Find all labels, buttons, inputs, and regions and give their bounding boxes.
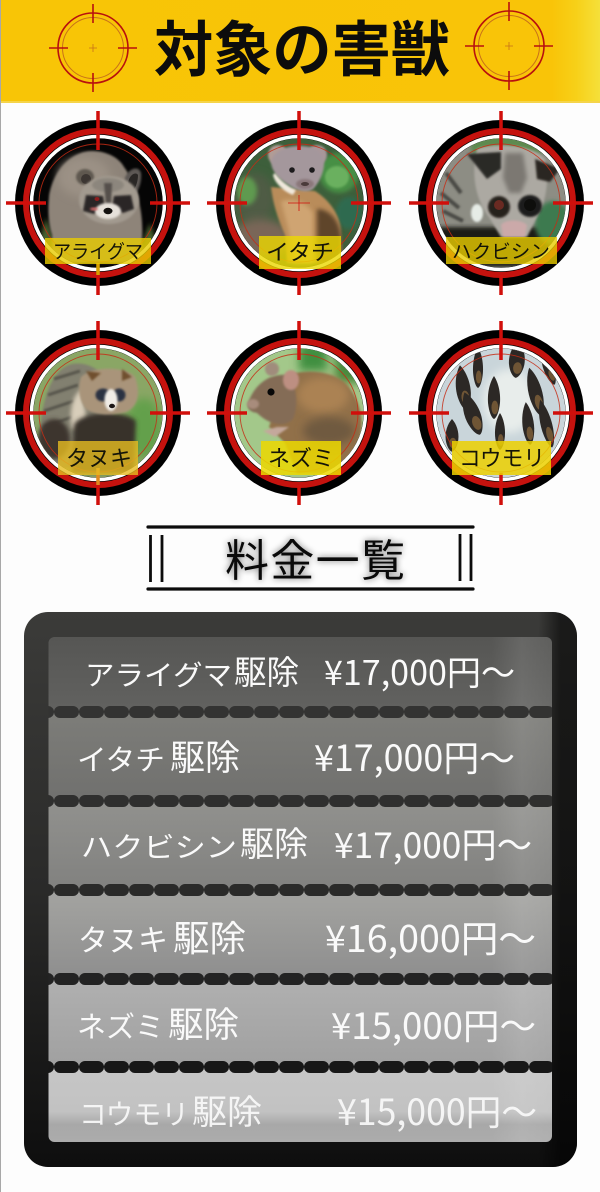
photo: rat <box>234 348 364 478</box>
row: tanuki price <box>78 909 536 963</box>
label: タヌキ <box>66 441 132 473</box>
heading: price list: 料金一覧 <box>225 525 405 589</box>
header banner <box>1 0 600 103</box>
row: rat price: ネズミ <box>77 1004 164 1046</box>
icon: right scope <box>465 2 553 90</box>
label: コウモリ <box>459 441 545 473</box>
row: civet price: ¥17,000円〜 <box>334 818 532 869</box>
row: rat price: ¥15,000円〜 <box>331 998 536 1050</box>
target: weasel <box>207 111 391 295</box>
row: weasel price: ¥17,000円〜 <box>314 730 515 782</box>
row: civet price: ハクビシン <box>81 826 237 866</box>
crosshair <box>409 321 593 505</box>
row: weasel price: イタチ <box>77 737 165 779</box>
crosshair <box>6 321 190 505</box>
heading: price list <box>148 525 473 589</box>
photo: bats <box>436 348 566 478</box>
row: weasel price: 駆除 <box>170 730 240 781</box>
row: tanuki price: 駆除 <box>173 910 246 962</box>
photo: tanuki <box>34 348 162 478</box>
crosshair <box>409 111 593 295</box>
row: raccoon price <box>85 646 515 695</box>
row: bat price: コウモリ <box>79 1093 189 1133</box>
panel: price table <box>24 612 577 1167</box>
label: ネズミ <box>268 441 334 473</box>
row: rat price <box>77 997 536 1050</box>
photo: civet <box>436 138 566 268</box>
heading: price list: 料金一覧 <box>225 525 405 589</box>
crosshair <box>207 111 391 295</box>
target: raccoon <box>6 111 190 295</box>
icon: left scope <box>49 4 137 92</box>
row: raccoon price: アライグマ <box>85 654 232 694</box>
row: civet price <box>81 817 532 869</box>
target: bats <box>409 321 593 505</box>
label: アライグマ <box>53 237 143 264</box>
photo: raccoon <box>34 138 162 267</box>
row: raccoon price: ¥17,000円〜 <box>324 646 515 695</box>
row: civet price: 駆除 <box>240 817 308 866</box>
row: weasel price <box>77 730 515 782</box>
photo: weasel <box>234 138 364 268</box>
label: ハクビシン <box>452 237 550 264</box>
row: tanuki price: タヌキ <box>78 916 168 960</box>
row: raccoon price: 駆除 <box>234 646 299 694</box>
target: rat <box>207 321 391 505</box>
row: rat price: 駆除 <box>168 997 239 1048</box>
row: bat price: 駆除 <box>192 1085 262 1134</box>
title: 対象の害獣 <box>154 2 450 89</box>
crosshair <box>6 111 190 295</box>
target: tanuki <box>6 321 190 505</box>
label: イタチ <box>266 235 334 267</box>
row: bat price <box>79 1084 537 1136</box>
target: civet <box>409 111 593 295</box>
crosshair <box>207 321 391 505</box>
row: tanuki price: ¥16,000円〜 <box>325 909 536 963</box>
dash rows <box>35 712 560 1067</box>
row: bat price: ¥15,000円〜 <box>337 1084 537 1136</box>
